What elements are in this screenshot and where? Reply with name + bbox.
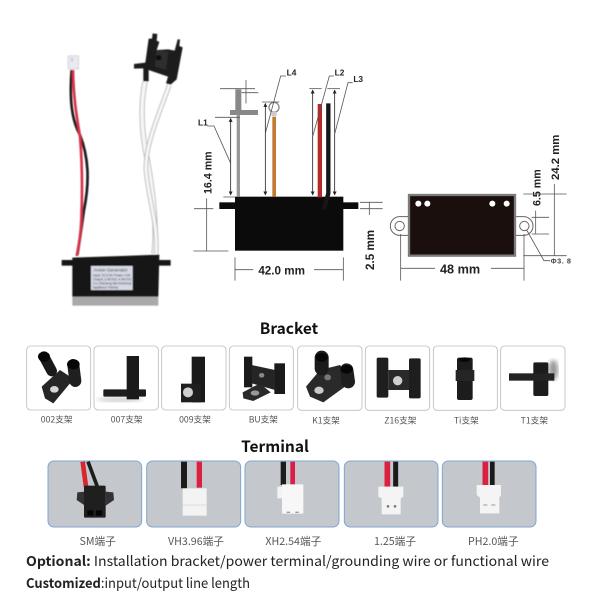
- card: BU: [229, 346, 293, 426]
- optional line: Optional: Installation bracket/power terminal/grounding wire or functional wire: [26, 550, 549, 570]
- card: 1.25: 1.25端子: [374, 534, 416, 549]
- card: VH3.96: VH3.96端子: [168, 534, 224, 549]
- card: 002: 002支架: [41, 414, 73, 426]
- dimension: 48 mm: [401, 234, 524, 281]
- dimension: 24.2 mm: [523, 135, 567, 256]
- wire L4 with ring terminal: [262, 102, 279, 197]
- terminal row: [48, 461, 536, 549]
- wire L2 red: [309, 89, 322, 197]
- card: BU: BU支架: [249, 414, 278, 426]
- dimension drawing: side view: [193, 67, 383, 281]
- product label: Input: DC3-5V Power:<1W: [93, 273, 130, 277]
- card: Z16: Z16支架: [384, 414, 417, 426]
- card: Z16: [365, 346, 430, 426]
- white JST connector: [68, 56, 79, 69]
- wires: white pair: [142, 82, 169, 254]
- dimension: 42.0 mm: 42.0 mm: [258, 264, 305, 277]
- card: XH2.54: [245, 461, 339, 549]
- card: 009: [162, 346, 226, 426]
- dimension: 24.2 mm: 24.2 mm: [550, 135, 562, 180]
- card: T1: T1支架: [521, 414, 548, 426]
- dimension: 16.4 mm: [193, 151, 235, 251]
- generator body: [62, 255, 171, 306]
- leader lines and labels: L4: [287, 67, 297, 77]
- dimension: 6.5 mm: [531, 169, 549, 234]
- card: 1.25: [344, 461, 438, 549]
- dimension: 42.0 mm: [235, 257, 343, 281]
- card: SM: [48, 461, 142, 549]
- dimension: hole diameter: Φ3. 8: [551, 257, 571, 266]
- customized line: Customized:input/output line length: [26, 572, 250, 592]
- card: PH2.0: PH2.0端子: [468, 534, 519, 549]
- dimension: 16.4 mm: 16.4 mm: [202, 151, 214, 194]
- card: 007: 007支架: [111, 414, 143, 426]
- dimension: 6.5 mm: 6.5 mm: [531, 169, 543, 206]
- dimension: 2.5 mm: 2.5 mm: [364, 230, 377, 270]
- black bracket on wires: [134, 33, 183, 85]
- card: VH3.96: [147, 461, 241, 549]
- bracket options 002 to BU: [27, 346, 293, 426]
- module body with tabs: [219, 197, 358, 251]
- card: 009: 009支架: [179, 414, 211, 426]
- card: Ti: [433, 346, 497, 426]
- product label: Co.:Zhicheng Net Electrical: [93, 282, 132, 286]
- card: T1: [501, 346, 565, 426]
- card: K1: [298, 346, 362, 426]
- bracket options K1 to T1: [298, 346, 565, 426]
- card: XH2.54: XH2.54端子: [265, 534, 322, 549]
- wires: red and black: [71, 70, 88, 256]
- bracket row: [27, 346, 565, 426]
- top view module with four holes: [409, 195, 515, 256]
- card: 007: [94, 346, 158, 426]
- card: SM: SM端子: [80, 534, 116, 549]
- card: 002: [27, 346, 91, 426]
- footer notes: [26, 550, 549, 592]
- card: K1: K1支架: [312, 414, 340, 426]
- leader lines and labels: L2: [335, 67, 345, 77]
- heading: Terminal: Terminal: [241, 435, 309, 457]
- heading: Bracket: Bracket: [260, 317, 319, 339]
- terminal options SM to XH2.54: [48, 461, 339, 549]
- leader lines and labels: L1: [198, 117, 208, 127]
- dimension drawing: top view: [390, 135, 571, 281]
- product label: Appliance Factory: [93, 286, 119, 290]
- wire L1 with bracket: [215, 80, 258, 197]
- product label: Output:-2.5KVDC-4.5KVDC: [93, 278, 132, 282]
- product photo: anion generator: [62, 33, 183, 306]
- dimension: 2.5 mm: [360, 202, 383, 270]
- mounting ears: [390, 217, 533, 235]
- product label: [91, 266, 133, 290]
- product label: Anion Generator: [94, 268, 128, 273]
- card: Ti: Ti支架: [454, 414, 479, 426]
- leader lines and labels: L3: [353, 74, 363, 84]
- leader lines and labels: [198, 67, 363, 163]
- card: PH2.0: [442, 461, 536, 549]
- wire L3 black: [324, 89, 340, 209]
- dimension: 48 mm: 48 mm: [440, 262, 480, 276]
- terminal options 1.25 to PH2.0: [344, 461, 536, 549]
- dimension: hole diameter: [527, 230, 571, 266]
